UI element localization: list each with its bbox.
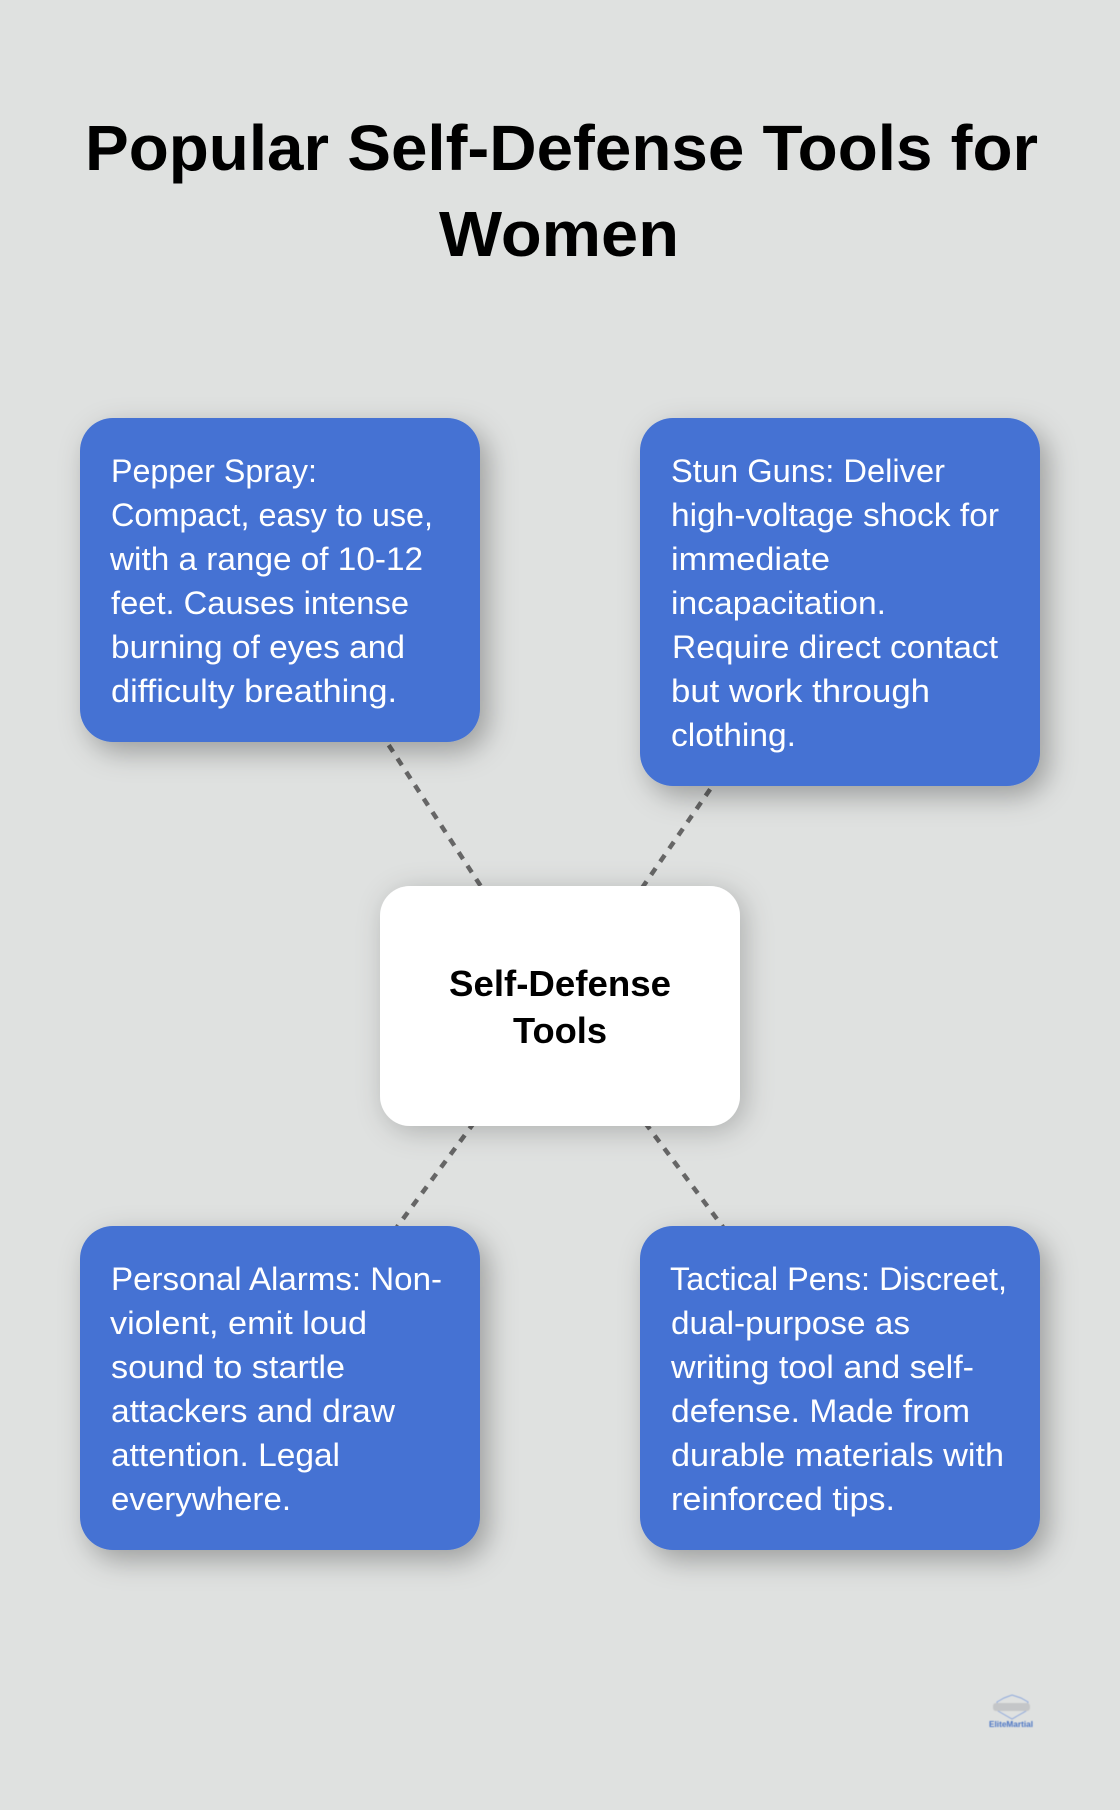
- panel: stun guns: clothing.: [671, 717, 796, 753]
- icon: brand logo: [989, 1695, 1033, 1729]
- panel: pepper spray: with a range of 10-12: [109, 541, 423, 577]
- panel: stun guns: incapacitation.: [671, 585, 886, 621]
- panel: stun guns: Require direct contact: [672, 629, 998, 665]
- panel: tactical pens: reinforced tips.: [671, 1481, 895, 1517]
- icon: brand logo: EliteMartial: [989, 1720, 1033, 1729]
- panel: stun guns: immediate: [671, 541, 830, 577]
- title: [85, 112, 1038, 270]
- title: Popular Self-Defense Tools for: [85, 112, 1038, 184]
- panel: tactical pens: dual-purpose as: [671, 1305, 910, 1341]
- panel: tactical pens: Tactical Pens: Discreet,: [670, 1261, 1007, 1297]
- panel: personal alarms: sound to startle: [111, 1349, 345, 1385]
- panel: personal alarms: Personal Alarms: Non-: [111, 1261, 442, 1297]
- panel: personal alarms: attackers and draw: [111, 1393, 396, 1429]
- connector: stun guns to center: [642, 788, 711, 888]
- panel: personal alarms: violent, emit loud: [110, 1305, 367, 1341]
- panel: tactical pens: writing tool and self-: [670, 1349, 974, 1385]
- panel: stun guns: Stun Guns: Deliver: [671, 453, 945, 489]
- connector: personal alarms to center: [397, 1124, 473, 1227]
- panel: personal alarms: everywhere.: [111, 1481, 291, 1517]
- connector: tactical pens to center: [646, 1124, 723, 1227]
- panel: stun guns: but work through: [671, 673, 930, 709]
- panel: center node: [380, 886, 740, 1126]
- panel: personal alarms: attention. Legal: [111, 1437, 340, 1473]
- panel: pepper spray: feet. Causes intense: [111, 585, 409, 621]
- title: Women: [439, 198, 679, 270]
- panel: pepper spray: difficulty breathing.: [111, 673, 397, 709]
- panel: pepper spray: Compact, easy to use,: [111, 497, 433, 533]
- panel: center node: Self-Defense: [449, 963, 671, 1004]
- panel: pepper spray: Pepper Spray:: [111, 453, 317, 489]
- panel: pepper spray: burning of eyes and: [111, 629, 405, 665]
- panel: pepper spray: [80, 418, 480, 742]
- panel: tactical pens: durable materials with: [671, 1437, 1004, 1473]
- connector: pepper spray to center: [388, 744, 482, 888]
- panel: tactical pens: [640, 1226, 1040, 1550]
- panel: stun guns: high-voltage shock for: [671, 497, 999, 533]
- panel: personal alarms: [80, 1226, 480, 1550]
- panel: center node: Tools: [513, 1010, 607, 1051]
- panel: stun guns: [640, 418, 1040, 786]
- panel: tactical pens: defense. Made from: [671, 1393, 970, 1429]
